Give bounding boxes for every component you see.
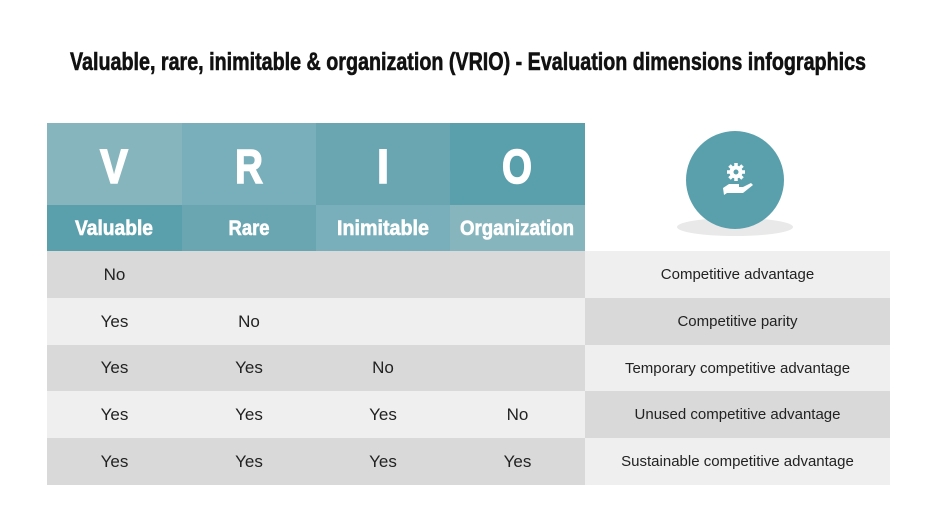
data table: Sustainable competitive advantage [621,453,854,470]
data table: Yes [504,452,531,470]
header table: Valuable [75,217,153,240]
header table: Organization [460,217,574,240]
data table: Yes [369,452,397,470]
header table [47,123,585,251]
icon: gear in hand [677,131,793,236]
header table: Inimitable [337,217,429,240]
data table: Yes [235,452,263,470]
header table: V [100,141,128,194]
data table: Unused competitive advantage [635,406,840,423]
header table: O [502,141,532,194]
data table: Yes [101,312,128,330]
data table: Competitive advantage [661,266,814,283]
data table: Yes [369,404,397,424]
data table [47,251,890,485]
data table: Temporary competitive advantage [625,360,850,376]
data table: Yes [101,452,128,470]
data table: Yes [101,358,128,377]
data table: Competitive parity [677,313,798,330]
data table: No [372,358,394,377]
data table: No [104,264,125,284]
data table: Yes [235,404,263,424]
data table: No [238,312,260,330]
header table: R [235,141,263,194]
data table: Yes [101,404,128,424]
header table: Rare [228,217,270,240]
data table: Yes [235,358,263,377]
data table: No [507,404,528,424]
header table: I [377,141,389,194]
